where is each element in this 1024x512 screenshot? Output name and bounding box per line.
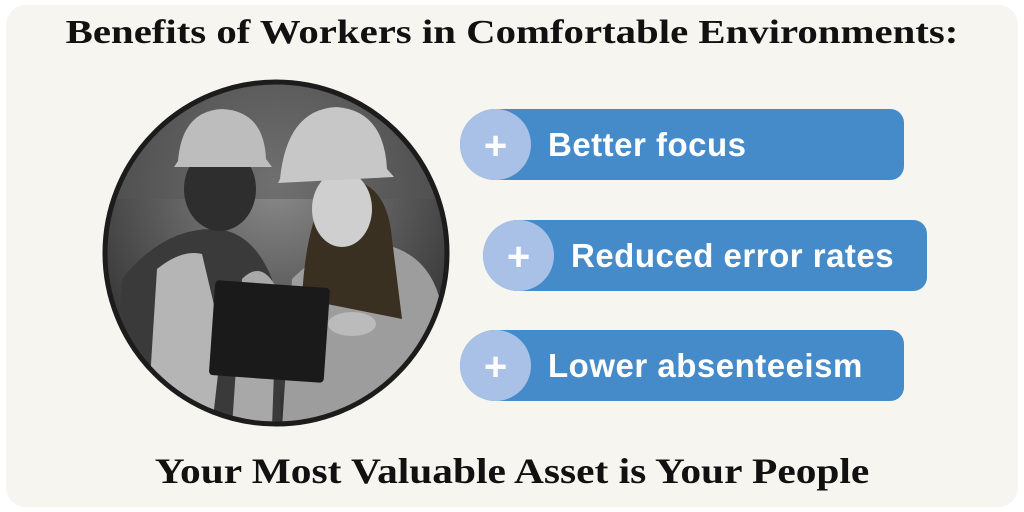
benefit: better focus [460, 109, 904, 180]
icon: plus: + [484, 124, 507, 168]
benefit: better focus: Better focus [548, 126, 747, 163]
benefit: lower absenteeism [460, 330, 904, 401]
title: Benefits of Workers in Comfortable Environments: [66, 14, 958, 51]
icon: plus: + [507, 235, 530, 279]
photo: two workers in hard hats [102, 80, 450, 426]
icon: plus [460, 109, 531, 180]
icon: plus [483, 220, 554, 291]
footer tagline: Your Most Valuable Asset is Your People [155, 451, 869, 491]
icon: plus [460, 330, 531, 401]
icon: plus: + [484, 345, 507, 389]
benefit: reduced error rates [483, 220, 927, 291]
benefit: reduced error rates: Reduced error rates [571, 237, 894, 274]
benefit: lower absenteeism: Lower absenteeism [548, 347, 863, 384]
